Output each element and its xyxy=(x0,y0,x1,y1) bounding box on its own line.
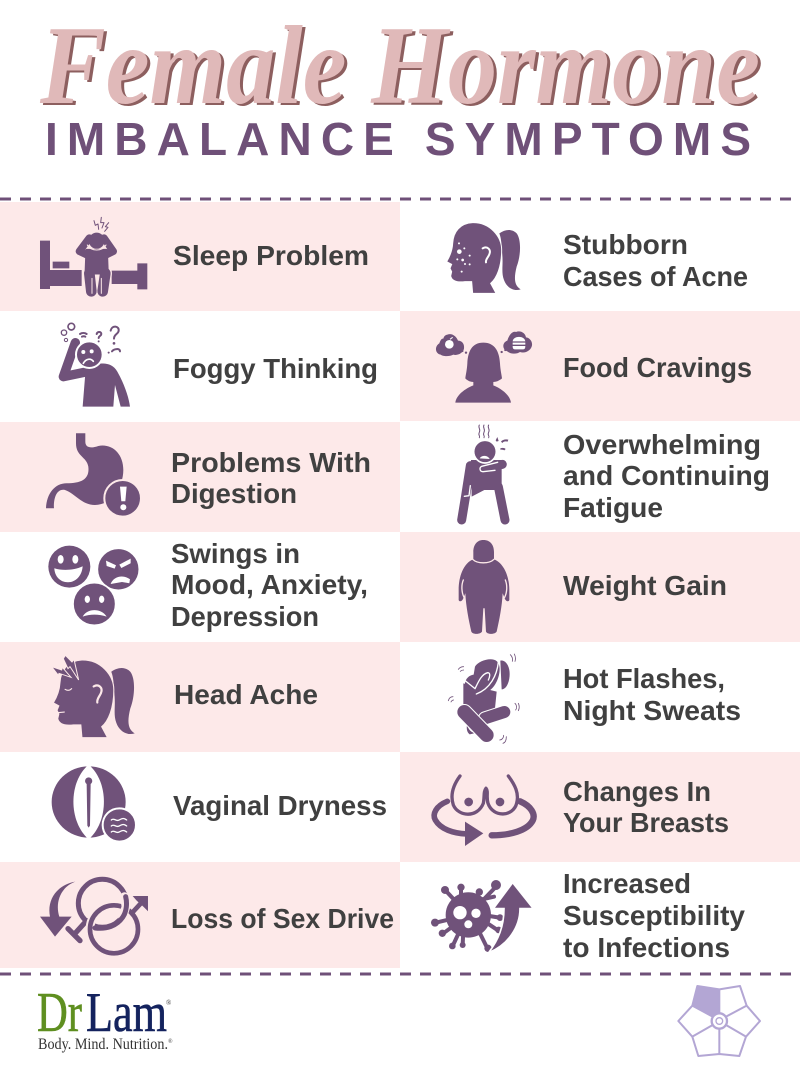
item: Sleep Problem xyxy=(40,217,369,293)
icon: head with acne xyxy=(447,223,521,293)
icon: head with lightning xyxy=(52,655,135,738)
icon: exhausted person xyxy=(462,425,508,520)
label xyxy=(563,229,748,292)
item: Overwhelming and Continuing Fatigue xyxy=(462,425,770,523)
row backgrounds xyxy=(0,202,800,968)
logo: Dr Lam: Dr xyxy=(37,982,82,1044)
label: Hot Flashes, xyxy=(563,663,725,694)
item: Stubborn Cases of Acne xyxy=(447,223,748,293)
icon: breasts with rotating arrow xyxy=(434,776,534,846)
logo: Dr Lam: Body. Mind. Nutrition. xyxy=(38,1036,168,1053)
label: Cases of Acne xyxy=(563,261,748,292)
label: Swings in xyxy=(171,538,300,569)
item: Head Ache xyxy=(52,655,318,738)
item: Weight Gain xyxy=(459,540,727,634)
label: Overwhelming xyxy=(563,429,761,460)
label: Problems With xyxy=(171,447,371,478)
item: Foggy Thinking xyxy=(61,323,378,407)
icon: overweight figure xyxy=(459,540,509,634)
subtitle: Imbalance Symptoms: IMBALANCE SYMPTOMS xyxy=(45,113,751,165)
logo: Dr Lam: Lam xyxy=(86,982,167,1044)
icon: dryness symbol xyxy=(52,765,136,842)
icon: three mood faces xyxy=(48,546,139,625)
item: Increased Susceptibility to Infections xyxy=(431,868,745,963)
icon: confused person xyxy=(61,323,130,407)
label xyxy=(171,538,368,632)
label: Your Breasts xyxy=(563,807,729,838)
label xyxy=(171,447,371,509)
label: Increased xyxy=(563,868,691,899)
label: Stubborn xyxy=(563,229,688,260)
label: Changes In xyxy=(563,776,711,807)
icon: sweating seated figure xyxy=(448,654,519,743)
label: Loss of Sex Drive xyxy=(171,903,394,934)
label: Digestion xyxy=(171,478,297,509)
icon: person sitting on bed xyxy=(40,217,147,293)
logo: Dr Lam: ® xyxy=(168,1038,173,1045)
item: Hot Flashes, Night Sweats xyxy=(448,654,741,743)
logo: Dr Lam: ® xyxy=(166,999,172,1007)
label: Vaginal Dryness xyxy=(173,790,387,821)
label: Weight Gain xyxy=(563,570,727,601)
label xyxy=(563,776,729,838)
logo: Dr Lam xyxy=(37,982,173,1053)
icon: gender symbols with down arrow xyxy=(40,879,148,953)
label xyxy=(563,429,770,523)
icon: virus with up arrow xyxy=(431,880,533,953)
item: Changes In Your Breasts xyxy=(434,776,729,846)
label: and Continuing xyxy=(563,460,770,491)
item: Problems With Digestion xyxy=(46,433,371,517)
label xyxy=(563,663,741,726)
item: Vaginal Dryness xyxy=(52,765,387,842)
item: Swings in Mood, Anxiety, Depression xyxy=(48,538,368,632)
label: Susceptibility xyxy=(563,900,745,931)
logo: flower emblem xyxy=(678,986,760,1056)
item: Loss of Sex Drive xyxy=(40,879,394,953)
label: Food Cravings xyxy=(563,352,752,383)
icon: stomach with alert xyxy=(46,433,141,517)
label xyxy=(563,868,745,963)
icon: woman thinking of food xyxy=(436,331,532,403)
item: Food Cravings xyxy=(436,331,752,403)
label: Night Sweats xyxy=(563,695,741,726)
label: Sleep Problem xyxy=(173,240,369,271)
label: to Infections xyxy=(563,932,730,963)
label: Mood, Anxiety, xyxy=(171,569,368,600)
label: Head Ache xyxy=(174,679,318,710)
label: Depression xyxy=(171,601,319,632)
label: Foggy Thinking xyxy=(173,353,378,384)
label: Fatigue xyxy=(563,492,663,523)
